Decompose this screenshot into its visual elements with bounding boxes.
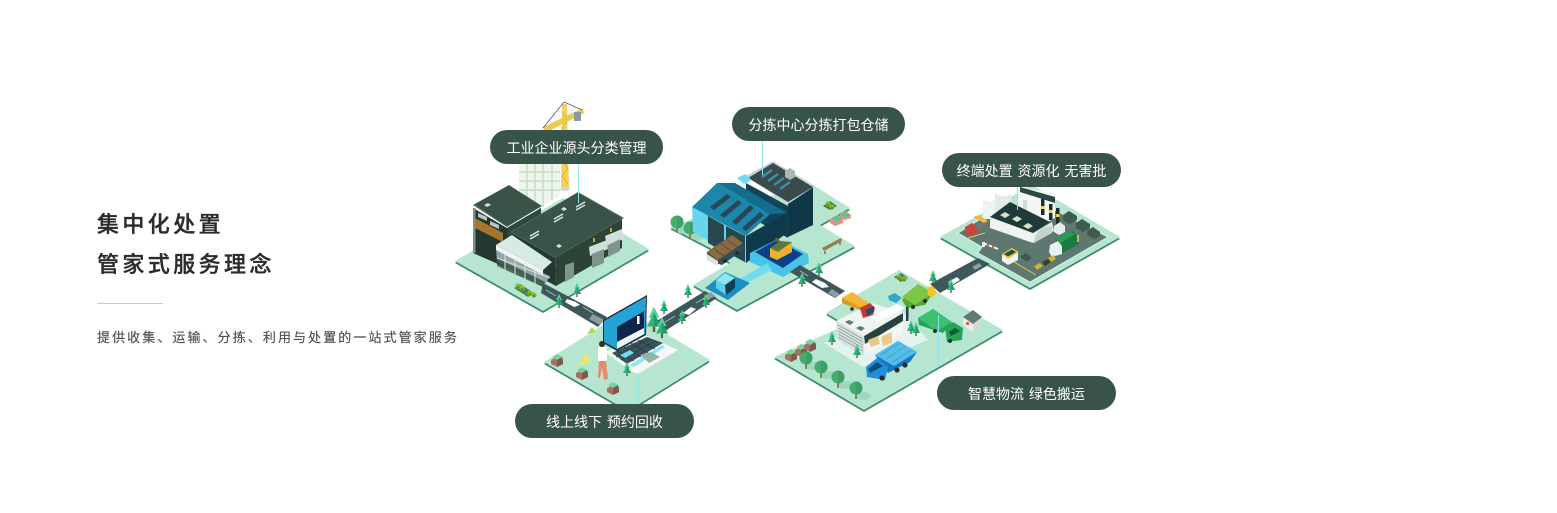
green truck upper [888,284,937,321]
sorting pit [750,238,809,277]
title line two: 管家式服务理念 [97,252,275,277]
shrubs [514,283,537,298]
small trees [828,320,920,358]
callout connector lines [578,140,1018,404]
warehouse [836,303,905,356]
callout: online: 线上线下 预约回收 [546,414,663,430]
building: rear block [473,185,542,268]
red truck and crane [965,215,988,236]
crane and tower [519,102,584,208]
callout: logistics: 智慧物流 绿色搬运 [968,386,1085,402]
factory rear [1017,187,1055,232]
slices and cubes [551,327,619,395]
callout: industrial: 工业企业源头分类管理 [506,140,646,156]
platform: industrial park [455,185,649,313]
planter top [894,273,908,282]
yellow and dark bins [1020,253,1056,270]
callout: sorting: 分拣中心分拣打包仓储 [748,117,888,133]
big trees [647,307,661,332]
small cubes [785,339,816,362]
dark green bins [1063,211,1100,239]
yellow truck [842,292,875,318]
callout: industrial [490,130,663,164]
platform: online platform [544,295,710,413]
round trees [670,216,705,240]
platform: sorting centre [670,161,855,312]
title: 集中化处置 [97,212,224,237]
green truck [1049,231,1079,257]
tanks [983,188,1011,219]
garbage truck [707,235,743,266]
gatehouse [1002,248,1019,265]
subtitle: 提供收集、运输、分拣、利用与处置的一站式管家服务 [97,330,459,345]
roadside trees [555,262,955,376]
callout: terminal: 终端处置 资源化 无害批 [957,163,1106,179]
round trees [800,352,871,400]
building: rear plant [737,161,815,238]
green truck lower [918,309,963,343]
road: logistics to terminal [930,258,990,293]
road: industrial to laptop [541,283,607,327]
road: sorting to logistics [790,265,845,298]
road: laptop to sorting [655,291,717,331]
callout: online [515,404,694,438]
barrier [982,242,998,249]
person [598,341,608,380]
callout: terminal [942,153,1121,187]
callout: logistics [937,376,1116,410]
callout: sorting [732,107,905,141]
factory front [990,202,1054,243]
yard [958,205,1108,282]
chimneys [1041,199,1065,235]
building: front canopy [496,235,552,287]
laptop [603,295,678,376]
building: main block [510,192,624,286]
planters [823,201,851,226]
building: blue warehouse [692,183,787,263]
green hut [963,310,982,332]
platform: smart logistics [774,270,1003,412]
compactor [705,272,750,300]
platform: terminal disposal [940,185,1120,290]
warehouse base [824,304,928,367]
conveyor [735,263,772,285]
blue truck [866,341,917,381]
bench [822,238,842,254]
